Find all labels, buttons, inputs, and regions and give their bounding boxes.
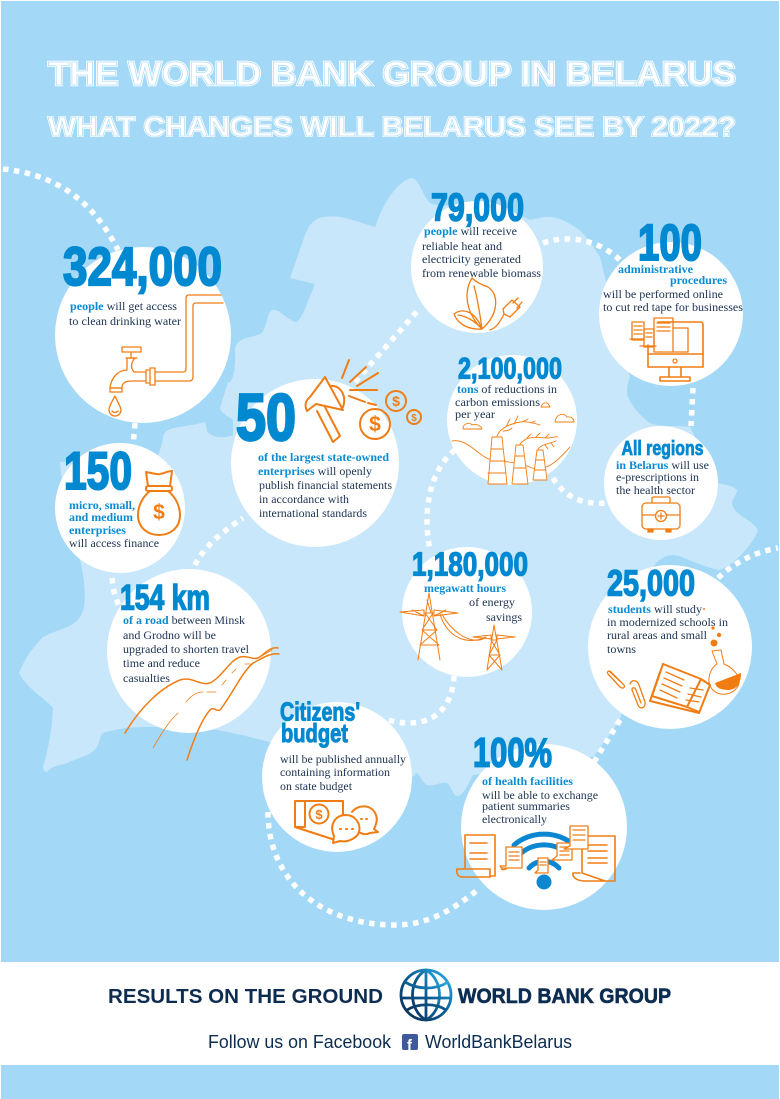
panel: 100% health facilities: patient summaries: [482, 799, 570, 813]
panel: 1,180,000 megawatt hours: megawatt hours: [424, 581, 506, 595]
title: WHAT CHANGES WILL BELARUS SEE BY 2022?: [48, 111, 736, 142]
dotted connector lines: [3, 169, 778, 925]
panel: 2,100,000 tons: [447, 352, 577, 485]
panel: 79,000 biomass: electricity generated: [422, 252, 521, 266]
panel: 100% health facilities: 100%: [473, 730, 552, 776]
panel: all regions e-prescriptions: in Belarus will use: [616, 458, 709, 472]
icon: winding road: [125, 648, 279, 760]
icon: documents: [457, 826, 615, 881]
icon: bubbles: [703, 608, 721, 646]
panel: 154 km road: time and reduce: [123, 656, 200, 670]
panel: 150 enterprises: enterprises: [69, 523, 126, 537]
panel: 79,000 biomass: from renewable biomass: [422, 266, 541, 280]
facebook line: Follow us on Facebook: [208, 1032, 392, 1052]
panel: 150 enterprises: [55, 442, 185, 573]
icon: megaphone and coins: [306, 360, 421, 442]
panel: 150 enterprises: will access finance: [69, 536, 159, 550]
panel: citizens' budget: containing information: [280, 765, 390, 779]
panel: 50 state-owned enterprises: in accordance with: [259, 492, 349, 506]
title: THE WORLD BANK GROUP IN BELARUS: [48, 55, 736, 92]
panel: 100 administrative procedures: 100: [638, 214, 702, 271]
map of Belarus: [19, 178, 758, 796]
panel: 50 state-owned enterprises: [231, 360, 421, 547]
panel: 2,100,000 tons: carbon emissions: [455, 395, 540, 409]
panel: citizens' budget: budget: [281, 718, 348, 748]
panel: all regions e-prescriptions: e-prescriptions in: [616, 470, 699, 484]
logotype: WORLD BANK GROUP: [458, 984, 671, 1008]
panel: 324,000 clean water: 324,000: [63, 237, 222, 297]
icon: facebook: [402, 1034, 418, 1054]
panel: citizens' budget: Citizens': [280, 696, 360, 726]
panel: 25,000 students: rural areas and small: [607, 628, 708, 642]
panel: 100 administrative procedures: will be performed online: [603, 287, 723, 301]
panel: 100 administrative procedures: administrative: [618, 262, 694, 276]
panel: 1,180,000 megawatt hours: savings: [486, 610, 522, 624]
icon: leaves and plug: [454, 278, 522, 330]
panel: 150 enterprises: and medium: [69, 510, 133, 524]
panel: 100% health facilities: electronically: [482, 812, 547, 826]
icon: banknote and chat bubbles: [295, 801, 378, 843]
panel: 50 state-owned enterprises: enterprises will openly: [258, 464, 372, 478]
panel: 100 administrative procedures: [599, 214, 743, 386]
panel: citizens' budget: on state budget: [280, 779, 353, 793]
panel: 50 state-owned enterprises: publish financial statements: [259, 478, 392, 492]
footer band: [0, 962, 780, 1065]
icon: electricity pylons: [400, 593, 515, 670]
panel: citizens' budget: [262, 696, 412, 852]
panel: 154 km road: [107, 569, 279, 760]
panel: 25,000 students: students will study: [608, 602, 702, 616]
panel: 154 km road: and Grodno will be: [123, 628, 216, 642]
panel: 25,000 students: towns: [607, 642, 636, 656]
panel: 50 state-owned enterprises: international standards: [259, 506, 367, 520]
icon: money bag: [138, 471, 180, 535]
icon: wifi: [514, 834, 574, 890]
panel: 100 administrative procedures: to cut red tape for businesses: [603, 300, 743, 314]
panel: 1,180,000 megawatt hours: 1,180,000: [412, 546, 528, 582]
panel: all regions e-prescriptions: [604, 426, 718, 540]
panel: 154 km road: 154 km: [120, 578, 210, 618]
panel: 2,100,000 tons: per year: [455, 407, 495, 421]
panel: 25,000 students: [588, 562, 752, 729]
panel: 324,000 clean water: to clean drinking water: [69, 314, 181, 328]
panel: 50 state-owned enterprises: 50: [236, 380, 296, 454]
icon: facebook: f: [407, 1037, 413, 1054]
icon: tap and pipe: [109, 295, 223, 416]
panel: 79,000 biomass: 79,000: [431, 186, 524, 230]
panel: 79,000 biomass: people will receive: [424, 224, 517, 238]
World Bank globe logo: [401, 970, 451, 1020]
icon: computer with documents: [630, 318, 703, 381]
panel: 154 km road: upgraded to shorten travel: [123, 642, 250, 656]
panel: 324,000 clean water: [55, 237, 231, 423]
icon: book, flask and clips: [607, 650, 741, 713]
panel: 25,000 students: in modernized schools in: [607, 615, 728, 629]
panel: all regions e-prescriptions: All regions: [622, 437, 704, 460]
panel: 324,000 clean water: people will get access: [70, 299, 177, 313]
panel: 50 state-owned enterprises: $: [392, 393, 400, 409]
panel: 154 km road: casualties: [123, 671, 170, 685]
panel: 150 enterprises: $: [153, 501, 165, 524]
panel: 1,180,000 megawatt hours: of energy: [469, 595, 515, 609]
panel: 79,000 biomass: [411, 186, 543, 333]
panel: 1,180,000 megawatt hours: [400, 546, 532, 677]
panel: all regions e-prescriptions: the health sector: [616, 483, 695, 497]
icon: first-aid kit: [642, 497, 680, 532]
facebook handle: WorldBankBelarus: [425, 1032, 572, 1052]
title: THE WORLD BANK GROUP IN BELARUS: [48, 55, 736, 92]
title: [48, 55, 736, 142]
icon: chimneys, clouds and sprigs: [452, 403, 574, 484]
panel: citizens' budget: $: [315, 807, 323, 822]
panel: 150 enterprises: 150: [64, 442, 132, 501]
panel: 50 state-owned enterprises: of the largest state-owned: [258, 450, 389, 464]
panel: 100 administrative procedures: procedures: [670, 273, 727, 287]
panel: 154 km road: of a road between Minsk: [123, 613, 245, 627]
panel: 150 enterprises: micro, small,: [69, 498, 135, 512]
footer heading: RESULTS ON THE GROUND: [108, 985, 383, 1008]
panel: 50 state-owned enterprises: $: [411, 413, 417, 424]
panel: 25,000 students: 25,000: [607, 562, 695, 604]
panel: 100% health facilities: [457, 730, 627, 910]
panel: 2,100,000 tons: tons of reductions in: [457, 382, 557, 396]
panel: 100% health facilities: will be able to exchange: [482, 788, 598, 802]
panel: 79,000 biomass: reliable heat and: [422, 239, 502, 253]
panel: 2,100,000 tons: 2,100,000: [458, 352, 562, 386]
panel: 100% health facilities: of health facilities: [482, 774, 573, 788]
panel: 50 state-owned enterprises: $: [369, 413, 381, 436]
title: WHAT CHANGES WILL BELARUS SEE BY 2022?: [48, 111, 736, 142]
panel: citizens' budget: will be published annually: [280, 752, 406, 766]
